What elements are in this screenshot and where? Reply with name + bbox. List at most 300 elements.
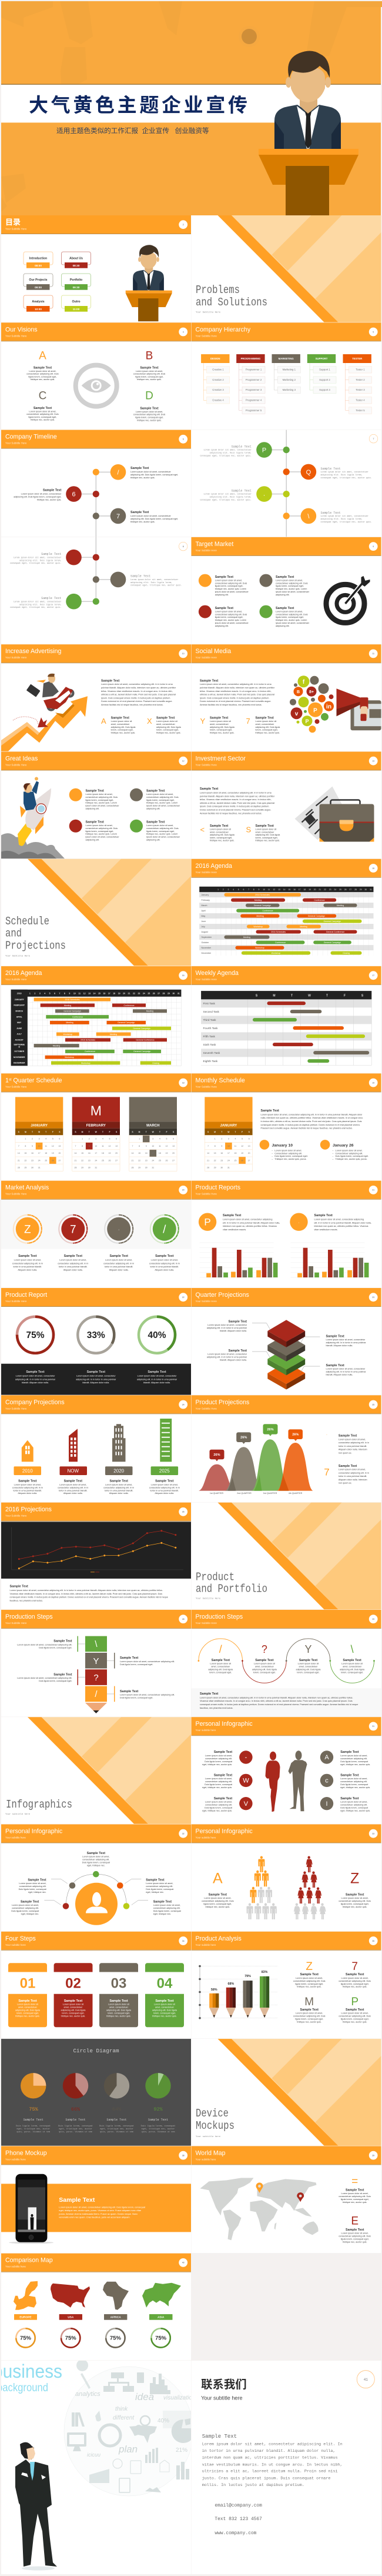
- idea text 4: [146, 820, 180, 841]
- column tester: Tester 3: [356, 388, 365, 391]
- market text 2: adipiscing elit.: [276, 594, 290, 596]
- donut Asia: [151, 2328, 170, 2348]
- timeline spine and nodes: [66, 464, 126, 537]
- header: Your Subtitle Here: [195, 549, 217, 552]
- layer text right: adipiscing elit. In in tortor in urna pulvinar: [326, 1342, 366, 1344]
- timeline text right: Lorem ipsum dolor sit amet, consectetuer: [321, 471, 368, 474]
- paragraph: consequat ornare mollis. In luctus justo at dapibus pretium. Donec euismod ex et erat placerat viverra.: [261, 1124, 360, 1126]
- January 26 note: January 26: [333, 1143, 354, 1147]
- gantt month labels: July: [201, 926, 205, 928]
- note M: ligula lorem, consequat eget,: [295, 2018, 323, 2020]
- agenda cards: 09:30: [73, 286, 80, 289]
- block A: [202, 1870, 234, 1908]
- body text: Lorem ipsum dolor sit amet, consectetur adipiscing elit. In in tortor in urna: [200, 683, 272, 685]
- calendar February: FEBRUARY: [86, 1124, 106, 1127]
- market texts: tortor in urna pulvinar blandit.: [150, 1266, 179, 1268]
- page number: [369, 434, 378, 443]
- percent and notes: 64%: [112, 2106, 122, 2112]
- timeline text left: consequat eget, tristique nec, auctor quis.: [200, 454, 252, 457]
- header: [1, 752, 191, 771]
- step 1: lorem, consequat eget.: [209, 1671, 232, 1673]
- vision A: [26, 350, 59, 381]
- month labels: OCTOBER: [14, 1050, 25, 1053]
- layer text left: Lorem ipsum dolor sit amet, consectetur: [207, 1324, 247, 1326]
- market texts: Lorem ipsum dolor sit amet,: [14, 1259, 41, 1262]
- step 04: Lorem ipsum dolor sit: [154, 2003, 176, 2005]
- step texts left: Duis ligula lorem, consequat eget.: [39, 1680, 72, 1682]
- vision C: [26, 390, 59, 421]
- column marketing: MARKETING: [279, 357, 294, 360]
- header: Your Subtitle Here: [5, 764, 27, 766]
- person circle: [75, 1883, 118, 1925]
- month labels: APRIL: [16, 1016, 22, 1018]
- projection texts: tortor in urna pulvinar blandit.: [105, 1489, 133, 1492]
- market text 4: Lorem ipsum dolor sit amet,: [276, 610, 303, 613]
- paragraph: In lectus nibh, ultricies a elit ac, laoreet dictum nulla. Proin sed nisi justo. Cras quis placerat ipsum. Duis: [261, 1120, 362, 1123]
- gantt bars: Workshop: [81, 1062, 91, 1064]
- dark text panel: Sample Text: [148, 1370, 166, 1374]
- right text: Sample Text: [340, 1797, 359, 1800]
- vision C: consectetuer adipiscing elit. Duis: [26, 413, 59, 415]
- step 03: [99, 1963, 138, 2027]
- note 7: ligula lorem, consequat eget,: [341, 1983, 369, 1985]
- column programming: Programmer 2: [246, 378, 262, 381]
- stacked layers diagram: [267, 1320, 305, 1390]
- gantt bars: Conference: [85, 1050, 95, 1053]
- body text: tellus. Vivamus vitae vestibulum mauris. In ut congue arcu. In lectus nibh,: [200, 798, 272, 801]
- column programming: Programmer 3: [246, 388, 262, 391]
- task labels: Third Task: [203, 1019, 216, 1022]
- gantt day numbers: 15: [289, 888, 290, 891]
- percent and notes: quis, purus. Vivamus ut sem: [16, 2131, 50, 2134]
- market texts: Aliquam dolor nulla.: [63, 1269, 83, 1272]
- timeline spine and nodes: [256, 430, 316, 537]
- right text: Lorem ipsum dolor sit amet,: [340, 1801, 367, 1803]
- header: [192, 1610, 381, 1629]
- step 04: tristique nec, auctor quis.: [152, 2015, 177, 2017]
- report dot: elit. In in tortor in urna pulvinar blandit. Aliquam dolor nulla,: [314, 1222, 371, 1224]
- header: Monthly Schedule: [195, 1077, 245, 1084]
- note M: [293, 1996, 326, 2023]
- step 1: /: [219, 1643, 222, 1655]
- gantt day numbers: 14: [283, 888, 286, 891]
- header: Phone Mockup: [5, 2149, 47, 2156]
- task labels: First Task: [203, 1002, 216, 1006]
- side note 1: [326, 1432, 369, 1455]
- donut USA: 75%: [65, 2335, 76, 2342]
- section: Problems and Solutions: [192, 215, 381, 322]
- pencil 83: [260, 1971, 269, 2018]
- men pyramid: [247, 1856, 277, 1919]
- header: st: [9, 1078, 12, 1081]
- section title: Your Subtitle Here: [5, 955, 31, 958]
- report P: Lorem ipsum dolor sit amet, consectetur adipiscing: [223, 1219, 272, 1221]
- top text: consectetuer adipiscing elit.: [82, 1858, 109, 1861]
- side note 1: Sample Text: [339, 1434, 357, 1437]
- gantt bars: Conference: [314, 899, 325, 901]
- header: 2016 Agenda: [195, 863, 232, 870]
- left text 1: Lorem ipsum dolor sit amet,: [19, 1882, 46, 1885]
- market text 3: ipsum dolor sit amet, consectetuer: [215, 622, 249, 624]
- calendar January: JANUARY: [31, 1124, 48, 1127]
- contact heading: 联系我们: [201, 2378, 247, 2391]
- step 03: Sample Text: [109, 1999, 128, 2003]
- column support: SUPPORT: [316, 357, 328, 360]
- task labels: Fourth Task: [203, 1027, 218, 1030]
- gantt bars: Workshop: [255, 947, 264, 949]
- column tester: Tester 5: [356, 409, 365, 412]
- header: [192, 2146, 381, 2165]
- step 01: Sample Text: [18, 1999, 37, 2003]
- body text: Sample Text: [101, 680, 120, 683]
- report P: vitae vestibulum mauris.: [223, 1229, 246, 1231]
- pencil diagram: Y: [93, 1656, 99, 1666]
- header: 39: [372, 2154, 374, 2156]
- left text 1: consectetuer adipiscing elit.: [19, 1885, 46, 1888]
- gantt day numbers: 21: [319, 888, 321, 891]
- pencil 79: [243, 1975, 253, 2018]
- projection texts: consectetur adipiscing elit. In in: [58, 1486, 88, 1489]
- item A: Lorem ipsum dolor sit: [111, 720, 132, 723]
- orange band: [1, 2184, 191, 2232]
- year and day numbers: 20: [123, 992, 125, 994]
- slide 22: Product Report: [1, 1288, 191, 1395]
- gantt month labels: September: [201, 936, 212, 938]
- hero white title band: [1, 84, 381, 122]
- contact details: email@company.com: [215, 2503, 262, 2508]
- right text 1: Lorem ipsum dolor sit amet,: [146, 1882, 173, 1885]
- header: 15: [372, 867, 374, 870]
- step 1: Sample Text: [212, 1659, 230, 1662]
- column programming: PROGRAMMING: [241, 357, 261, 360]
- step texts right: Lorem ipsum dolor sit amet, consectetuer adipiscing elit.: [120, 1660, 175, 1663]
- market text 4: tristique nec, auctor quis. Lorem: [276, 619, 307, 621]
- section title: Product: [196, 1570, 234, 1583]
- step 4: adipiscing elit. Duis ligula: [340, 1668, 365, 1670]
- year and day numbers: 31: [177, 992, 180, 994]
- market texts: Sample Text: [110, 1254, 128, 1258]
- step 2: amet, consectetuer: [255, 1665, 274, 1668]
- step 1: Lorem ipsum dolor sit: [210, 1663, 232, 1665]
- idea text 3: Lorem ipsum dolor sit amet,: [86, 824, 113, 827]
- grey panel: [1, 1200, 191, 1249]
- header: Your subtitle here: [195, 1836, 216, 1839]
- timeline text right: Lorem ipsum dolor sit amet, consectetuer: [321, 515, 368, 518]
- side note 2: [324, 1465, 369, 1485]
- gantt bars: Meeting: [146, 1010, 153, 1013]
- gantt bars: Meeting: [256, 915, 264, 917]
- column design: Creative 2: [212, 378, 224, 381]
- step 02: [54, 1963, 93, 2027]
- doodle handwriting: 21%: [176, 2447, 187, 2454]
- month labels: SEPTEMBE: [14, 1043, 25, 1046]
- header: Personal Infographic: [195, 1828, 253, 1835]
- gantt table: [11, 990, 181, 1066]
- idea text 4: Lorem ipsum dolor sit amet,: [146, 824, 173, 827]
- donut Europe: 75%: [20, 2335, 32, 2342]
- timeline text right: consequat eget, tristique nec, auctor quis.: [321, 521, 372, 524]
- pie 66: [63, 2073, 88, 2098]
- left text: Duis ligula lorem, consequat: [205, 1783, 233, 1786]
- step 02: amet, consectetuer: [64, 2006, 83, 2008]
- header: 2: [183, 224, 184, 226]
- step 2: ?: [262, 1643, 267, 1655]
- year labels: 2010: [22, 1469, 33, 1474]
- gantt day numbers: 30: [364, 888, 367, 891]
- header: Target Market: [195, 541, 233, 548]
- header: 2016 Agenda: [5, 970, 42, 977]
- grey text panel: Sample Text: [200, 1692, 219, 1696]
- right text: consectetuer adipiscing elit.: [340, 1758, 367, 1760]
- item S: S: [246, 825, 252, 834]
- gantt day numbers: 3: [227, 888, 229, 891]
- map note 1: [339, 2175, 371, 2204]
- timeline text 3: Sample Text: [130, 511, 149, 514]
- January 10 note: Consectetuer adipiscing elit.: [274, 1152, 302, 1154]
- year and day numbers: 4: [44, 992, 45, 994]
- pin orange: [256, 2182, 263, 2193]
- contact paragraph: mollis. In luctus justo at dapibus pretium.: [202, 2483, 304, 2488]
- vision C: Lorem ipsum dolor sit amet,: [29, 410, 56, 412]
- idea text 2: ipsum dolor sit amet, consectetuer: [146, 805, 180, 807]
- gantt day numbers: 5: [238, 888, 239, 891]
- timeline text left: consequat eget, tristique nec, auctor quis.: [10, 606, 61, 609]
- left text 2: Sample Text: [21, 1901, 39, 1904]
- side note 2: Lorem ipsum dolor sit amet,: [339, 1469, 366, 1471]
- pencil 68: [226, 1982, 236, 2018]
- item Y: lorem, consequat eget,: [210, 729, 232, 731]
- year and day numbers: 19: [118, 992, 120, 994]
- phone text: [59, 2196, 146, 2218]
- block A: tristique nec, auctor quis.: [206, 1906, 230, 1908]
- chart description: Lorem ipsum dolor sit amet, consectetur adipiscing elit. In in tortor in urna pulvinar blandit. Aliquam dolor nulla, interdum non quam ac, ultricies porttitor tellus.: [9, 1589, 163, 1592]
- ring dot: [105, 1215, 133, 1243]
- block Z: Lorem ipsum dolor sit amet,: [341, 1897, 368, 1899]
- report dot: [290, 1213, 371, 1231]
- step 01: [8, 1963, 47, 2027]
- vision A: Lorem ipsum dolor sit amet,: [29, 370, 56, 372]
- dark text panel: adipiscing elit. In in tortor in urna pulvinar: [15, 1378, 56, 1380]
- step 02: tristique nec, auctor quis.: [61, 2015, 85, 2017]
- step 02: lorem, consequat eget,: [62, 2012, 85, 2014]
- market texts: Sample Text: [64, 1254, 82, 1258]
- vision C: C: [39, 390, 46, 402]
- layer text right: Lorem ipsum dolor sit amet, consectetur: [326, 1367, 366, 1370]
- gantt day numbers: 18: [304, 888, 306, 891]
- percent and notes: eget, tristique nec, auctor: [142, 2128, 175, 2131]
- percent and notes: Sample Text: [24, 2118, 43, 2122]
- gantt bars: Meeting: [300, 926, 307, 928]
- timeline text left: adipiscing elit. Duis ligula lorem,: [19, 603, 61, 606]
- projection texts: tortor in urna pulvinar blandit.: [59, 1489, 88, 1492]
- note P: consectetuer adipiscing elit. Duis: [339, 2015, 371, 2017]
- month labels: R: [18, 1046, 20, 1049]
- layer text right: Sample Text: [326, 1334, 344, 1338]
- January 10 note: Tristique nec, auctor quis, purus.: [274, 1158, 307, 1160]
- market text 2: tristique nec, auctor quis. Lorem: [276, 588, 307, 590]
- step texts right: Duis ligula lorem, consequat eget.: [120, 1663, 153, 1666]
- diagram title: Circle Diagram: [73, 2048, 119, 2054]
- header: 11: [372, 653, 374, 655]
- agenda cards: 09:00: [35, 286, 42, 289]
- timeline text 1: Sample Text: [130, 467, 149, 470]
- gantt bars: General Conference: [136, 1039, 155, 1041]
- percent and notes: Duis ligula lorem, consequat: [16, 2125, 51, 2128]
- header: 16: [182, 974, 185, 977]
- gantt bars: 2016 Schedules: [65, 999, 80, 1001]
- pencil diagram: [85, 1636, 107, 1713]
- timeline text left: [200, 445, 252, 501]
- percent and notes: Duis ligula lorem, consequat: [99, 2125, 134, 2128]
- right text: eget, tristique nec, auctor quis.: [340, 1810, 370, 1812]
- header: 18: [182, 1081, 185, 1084]
- header: Investment Sector: [195, 756, 246, 763]
- map note 1: consectetuer adipiscing elit. Duis: [339, 2195, 371, 2198]
- side note 2: Sample Text: [339, 1465, 357, 1468]
- header: Your Subtitle Here: [195, 1622, 217, 1625]
- body text: Lorem ipsum dolor sit amet, consectetur adipiscing elit. In in tortor in urna: [200, 792, 272, 794]
- pie 64: [104, 2073, 129, 2098]
- body text: Aenean facilisis nisi id neque faucibus, nec pharetra erat luctus.: [200, 704, 262, 706]
- idea text 1: ligula lorem, consequat eget,: [86, 799, 113, 801]
- dark text panel: blandit. Aliquam dolor nulla.: [82, 1382, 109, 1384]
- vision D: [133, 390, 165, 421]
- arc with dots: [63, 1871, 129, 1909]
- market text 4: Sample Text: [276, 607, 294, 610]
- timeline text left: Sample Text: [232, 490, 252, 493]
- layer text right: Sample Text: [326, 1364, 344, 1367]
- timeline text 2: adipiscing elit. Duis ligula lorem, consequat eget,: [14, 495, 61, 498]
- header: Your Subtitle Here: [195, 871, 217, 874]
- vision A: consectetuer adipiscing elit. Duis: [26, 373, 59, 375]
- body text: [101, 680, 176, 706]
- step 3: Lorem ipsum dolor sit: [298, 1663, 319, 1665]
- section title: Device: [196, 2107, 229, 2120]
- vision A: Sample Text: [33, 366, 52, 370]
- step 04: [145, 1963, 184, 2027]
- ring Z: [14, 1215, 42, 1243]
- presenter: [126, 245, 172, 321]
- item less-than: Sample Text: [210, 824, 229, 828]
- doodle circle background: [64, 2367, 193, 2496]
- right text: Sample Text: [340, 1750, 359, 1754]
- gantt bars: Meeting: [254, 899, 262, 901]
- section title: Your Subtitle Here: [196, 311, 221, 314]
- item X: tristique nec, auctor quis.: [156, 731, 181, 734]
- header: Your Subtitle Here: [195, 1407, 217, 1410]
- gantt bars: Conference: [262, 910, 273, 912]
- left text 2: Lorem ipsum dolor sit amet,: [12, 1904, 39, 1906]
- vision D: tristique nec, auctor quis.: [137, 419, 162, 421]
- item A: adipiscing elit. Duis ligula: [111, 726, 136, 728]
- section title: [196, 1570, 267, 1600]
- grey text panel: Lorem ipsum dolor sit amet, consectetur adipiscing elit. In in tortor in urna pulvinar blandit. Aliquam dolor nulla, interdum non quam ac, ultricies porttitor tellus.: [200, 1696, 353, 1699]
- column marketing: Marketing 1: [283, 368, 296, 371]
- timeline text right: consequat eget, tristique nec, auctor quis.: [130, 584, 182, 587]
- vision B: consectetuer adipiscing elit. Duis: [133, 373, 165, 375]
- gantt bars: Meeting: [66, 1021, 73, 1024]
- agenda cards: [24, 252, 91, 312]
- closing image panel: [0, 2359, 196, 2574]
- calendar: JANUARY: [220, 1124, 237, 1127]
- idea text 2: tristique nec, auctor quis. Lorem: [146, 802, 177, 804]
- left text: consectetuer adipiscing elit.: [205, 1780, 232, 1783]
- market text 1: Lorem ipsum dolor sit amet,: [215, 579, 242, 581]
- note M: consectetuer adipiscing elit. Duis: [293, 2015, 326, 2017]
- gantt day numbers: 9: [258, 888, 259, 891]
- badges: I: [326, 1800, 328, 1808]
- contact paragraph: ultricies a elit ac, laoreet dictum nulla. Proin sed nisi: [202, 2470, 338, 2474]
- briefcase with papers: [295, 786, 374, 841]
- item Y: tristique nec, auctor quis.: [210, 731, 234, 734]
- month labels: MARCH: [15, 1010, 24, 1012]
- gantt bars: General Campaign: [308, 915, 325, 917]
- pencil diagram: ?: [93, 1673, 99, 1683]
- item Y: adipiscing elit. Duis ligula: [210, 726, 235, 728]
- layer text left: blandit. Aliquam dolor nulla.: [220, 1330, 247, 1332]
- note Z: tristique nec, auctor quis.: [297, 1985, 321, 1988]
- note P: [339, 1996, 371, 2023]
- projection texts: [12, 1480, 180, 1495]
- icon: target with arrow: [326, 576, 370, 623]
- header: 2016 Projections: [5, 1506, 52, 1513]
- rising arrow: [1, 696, 88, 751]
- gantt day numbers: 25: [339, 888, 341, 891]
- contact paragraph: Sample Text: [202, 2434, 237, 2439]
- section title: Schedule: [5, 915, 49, 928]
- note P: Sample Text: [346, 2008, 364, 2012]
- slide 23: Quarter Projections: [192, 1288, 381, 1395]
- projection texts: Lorem ipsum dolor sit amet,: [14, 1483, 41, 1486]
- header: [192, 1717, 381, 1736]
- percent and notes: Sample Text: [148, 2118, 168, 2122]
- map Africa: [103, 2282, 129, 2310]
- item 7: lorem, consequat eget,: [255, 729, 278, 731]
- badges: [239, 1750, 333, 1810]
- header: Your subtitle here: [195, 1729, 216, 1732]
- step 2: Lorem ipsum dolor sit: [254, 1663, 276, 1665]
- gantt day numbers: 6: [243, 888, 244, 891]
- percent and notes: eget, tristique nec, auctor: [16, 2128, 50, 2131]
- item 7: amet, consectetuer: [255, 723, 274, 725]
- timeline text 1: [130, 467, 178, 479]
- step 04: adipiscing elit. Duis ligula: [152, 2009, 177, 2011]
- market text 2: consectetuer adipiscing elit. Duis: [276, 582, 308, 584]
- header: [192, 1395, 381, 1414]
- item Y: [200, 717, 235, 734]
- left text 1: Sample Text: [28, 1878, 46, 1882]
- header: 20: [182, 1189, 185, 1192]
- map note 2: E: [351, 2215, 358, 2227]
- header: 12: [182, 760, 185, 763]
- header: [1, 1288, 191, 1307]
- left text: Lorem ipsum dolor sit amet,: [205, 1801, 232, 1803]
- body text: [200, 680, 275, 706]
- doodle handwriting: visualization: [163, 2395, 196, 2401]
- timeline text right: adipiscing elit. Duis ligula lorem,: [130, 581, 172, 584]
- side note 2: tortor in urna pulvinar blandit.: [339, 1475, 367, 1477]
- timeline text left: consequat eget, tristique nec, auctor quis.: [200, 498, 252, 501]
- dark text panel: adipiscing elit. In in tortor in urna pulvinar: [76, 1378, 116, 1380]
- header: 38: [182, 2154, 185, 2156]
- gantt day numbers: 11: [268, 888, 270, 891]
- percent and notes: Duis ligula lorem, consequat: [141, 2125, 175, 2128]
- column tester: Tester 4: [356, 399, 365, 402]
- gantt month labels: November: [201, 947, 212, 949]
- gantt day numbers: 26: [344, 888, 347, 891]
- market text 2: Sample Text: [276, 575, 294, 579]
- timeline text right: Sample Text: [321, 511, 341, 515]
